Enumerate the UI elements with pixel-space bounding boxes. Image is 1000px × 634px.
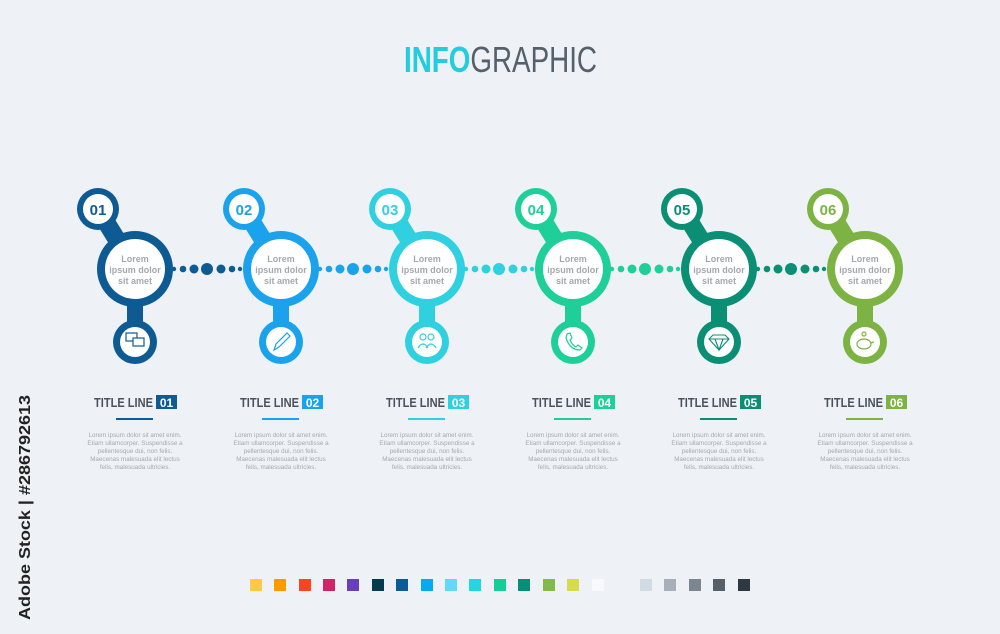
circle labels: ipsum dolor	[547, 265, 599, 275]
step 05	[661, 188, 757, 364]
titles and descriptions: 05	[744, 396, 757, 410]
step 03: 03	[382, 202, 398, 219]
title: INFOGRAPHIC	[404, 39, 597, 80]
circle labels: sit amet	[702, 276, 736, 286]
circle labels: sit amet	[556, 276, 590, 286]
circle labels: sit amet	[848, 276, 882, 286]
step 06	[807, 188, 903, 364]
circle labels: ipsum dolor	[693, 265, 745, 275]
side watermark text: Adobe Stock | #286792613	[17, 395, 34, 620]
circle labels: Lorem	[559, 254, 587, 264]
circle labels: ipsum dolor	[401, 265, 453, 275]
titles and descriptions: 04	[598, 396, 611, 410]
step 04	[515, 188, 611, 364]
circle labels: sit amet	[410, 276, 444, 286]
step 05: 05	[674, 202, 690, 219]
step 04: 04	[528, 202, 545, 219]
titles and descriptions: 01	[160, 396, 173, 410]
step 06: 06	[820, 202, 836, 219]
dots connectors	[172, 263, 826, 275]
step 01: 01	[90, 202, 106, 219]
titles and descriptions	[87, 395, 913, 471]
titles and descriptions: 03	[452, 396, 465, 410]
circle labels	[109, 254, 891, 286]
circle labels: Lorem	[267, 254, 295, 264]
titles and descriptions: 06	[890, 396, 903, 410]
step 01	[77, 188, 173, 364]
step 03	[369, 188, 465, 364]
circle labels: Lorem	[851, 254, 879, 264]
circle labels: Lorem	[413, 254, 441, 264]
circle labels: ipsum dolor	[109, 265, 161, 275]
circle labels: ipsum dolor	[839, 265, 891, 275]
titles and descriptions: 02	[306, 396, 319, 410]
circle labels: sit amet	[264, 276, 298, 286]
colour palette	[250, 579, 750, 591]
step 02: 02	[236, 202, 252, 219]
circle labels: Lorem	[705, 254, 733, 264]
circle labels: Lorem	[121, 254, 149, 264]
circle labels: ipsum dolor	[255, 265, 307, 275]
circle labels: sit amet	[118, 276, 152, 286]
step 02	[223, 188, 319, 364]
